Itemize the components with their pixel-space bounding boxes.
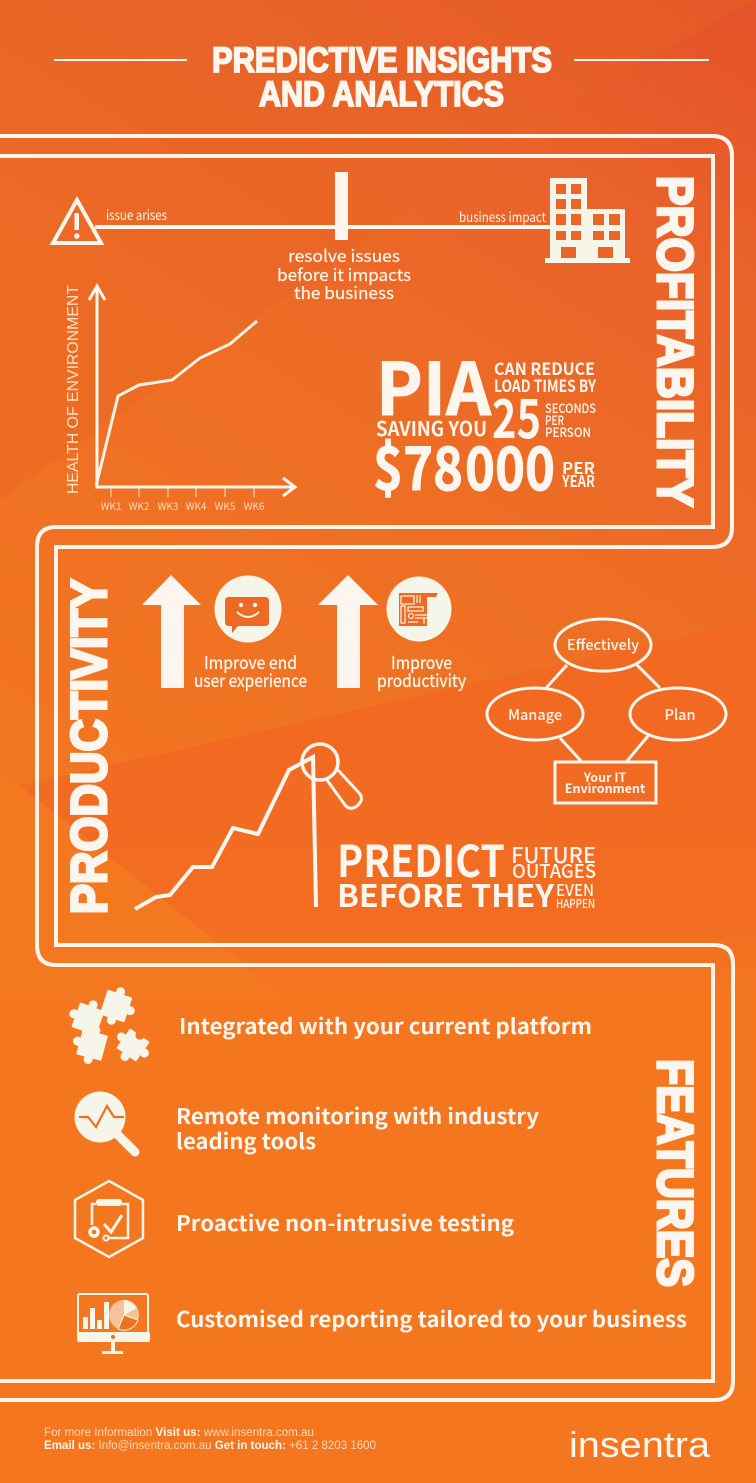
line chart: health of environment: [65, 285, 295, 513]
diagram: manage your IT environment: Manage: [508, 704, 562, 725]
stat: PIA savings: LOAD TIMES BY: [494, 372, 596, 397]
diagram: manage your IT environment: Environment: [565, 778, 646, 797]
feature text: customised reporting: Customised reporting tailored to your business: [176, 1303, 687, 1334]
stat: PIA savings: PIA: [376, 331, 492, 436]
text: improve end user experience: [194, 650, 307, 693]
line chart: health of environment: WK2: [129, 498, 150, 513]
line chart: health of environment: WK1: [101, 498, 121, 513]
line chart: health of environment: WK6: [244, 498, 265, 513]
feature text: remote monitoring: [176, 1100, 540, 1156]
text: predict future outages: EVEN: [556, 877, 594, 901]
text: predict future outages: FUTURE: [511, 838, 596, 870]
axis title: HEALTH OF ENVIRONMENT: [65, 285, 82, 494]
title: PREDICTIVE INSIGHTS: [212, 41, 552, 80]
stat: PIA savings: SECONDS: [545, 398, 596, 417]
stat: PIA savings: PER: [545, 410, 564, 429]
title: [212, 41, 552, 114]
label: resolve issues: before it impacts: [277, 262, 411, 286]
icon: puzzle pieces: [65, 983, 158, 1071]
line chart: health of environment: WK3: [158, 498, 178, 513]
text: predict future outages: HAPPEN: [556, 895, 595, 912]
logo: insentra: insentra: [569, 1424, 711, 1465]
stat: PIA savings: [373, 331, 596, 508]
title: AND ANALYTICS: [259, 75, 504, 114]
stat: PIA savings: PERSON: [545, 422, 591, 441]
line chart: health of environment: WK5: [215, 498, 236, 513]
diagram: manage your IT environment: Your IT: [583, 767, 626, 786]
label: business impact: business impact: [459, 206, 546, 226]
text: improve productivity: Improve: [391, 650, 452, 675]
label: resolve issues: resolve issues: [288, 243, 400, 267]
feature text: integrated: Integrated with your current platform: [179, 1010, 592, 1041]
diagram: manage your IT environment: Effectively: [567, 634, 639, 655]
feature text: remote monitoring: Remote monitoring with industry: [176, 1100, 540, 1131]
stat: PIA savings: PER: [562, 455, 595, 479]
stat: PIA savings: 000: [465, 421, 555, 508]
text: improve end user experience: Improve end: [204, 650, 297, 675]
icon: hexagon clipboard: [75, 1181, 143, 1257]
feature text: proactive testing: Proactive non-intrusive testing: [176, 1207, 514, 1238]
text: predict future outages: [337, 826, 596, 916]
text: improve end user experience: user experience: [194, 668, 307, 693]
icon: warning triangle: [53, 200, 101, 243]
diagram: manage your IT environment: Plan: [664, 704, 696, 725]
chart: predicting outage line with magnifier: [135, 744, 361, 909]
stat: PIA savings: SAVING YOU: [376, 413, 487, 442]
footer contact text: Email us: Info@insentra.com.au Get in touch: +61 2 8203 1600: [44, 1440, 376, 1452]
label: resolve issues: the business: [294, 280, 394, 304]
label: resolve issues: [277, 243, 411, 304]
feature text: remote monitoring: leading tools: [176, 1125, 316, 1156]
text: predict future outages: BEFORE THEY: [337, 871, 555, 916]
stat: PIA savings: 25: [492, 375, 541, 454]
title side rules: [54, 59, 709, 61]
icon: magnifier with pulse: [74, 1092, 135, 1152]
footer contact text: [44, 1427, 376, 1452]
arrow: improve productivity: [318, 575, 378, 688]
icon: smiley chat bubble: [214, 576, 282, 642]
section heading: features: FEATURES: [647, 1059, 703, 1287]
footer contact text: For more Information Visit us: www.insentra.com.au: [44, 1427, 314, 1439]
label: issue arises: issue arises: [106, 204, 167, 224]
stat: PIA savings: YEAR: [561, 468, 595, 492]
timeline: [53, 172, 630, 304]
icon: monitor with charts: [77, 1294, 150, 1354]
stat: PIA savings: CAN REDUCE: [494, 355, 595, 380]
stat: PIA savings: $78: [373, 421, 463, 508]
diagram: manage your IT environment: [487, 619, 726, 803]
section heading: profitability: PROFITABILITY: [647, 176, 703, 507]
line chart: health of environment: WK4: [186, 498, 207, 513]
text: improve productivity: [377, 650, 466, 693]
icon: blueprint: [386, 576, 452, 642]
text: predict future outages: OUTAGES: [512, 857, 596, 884]
text: improve productivity: productivity: [377, 668, 466, 693]
section heading: productivity: PRODUCTIVITY: [61, 579, 117, 914]
text: predict future outages: PREDICT: [337, 826, 505, 890]
icon: office building: [545, 178, 630, 263]
arrow: improve experience: [142, 575, 201, 688]
